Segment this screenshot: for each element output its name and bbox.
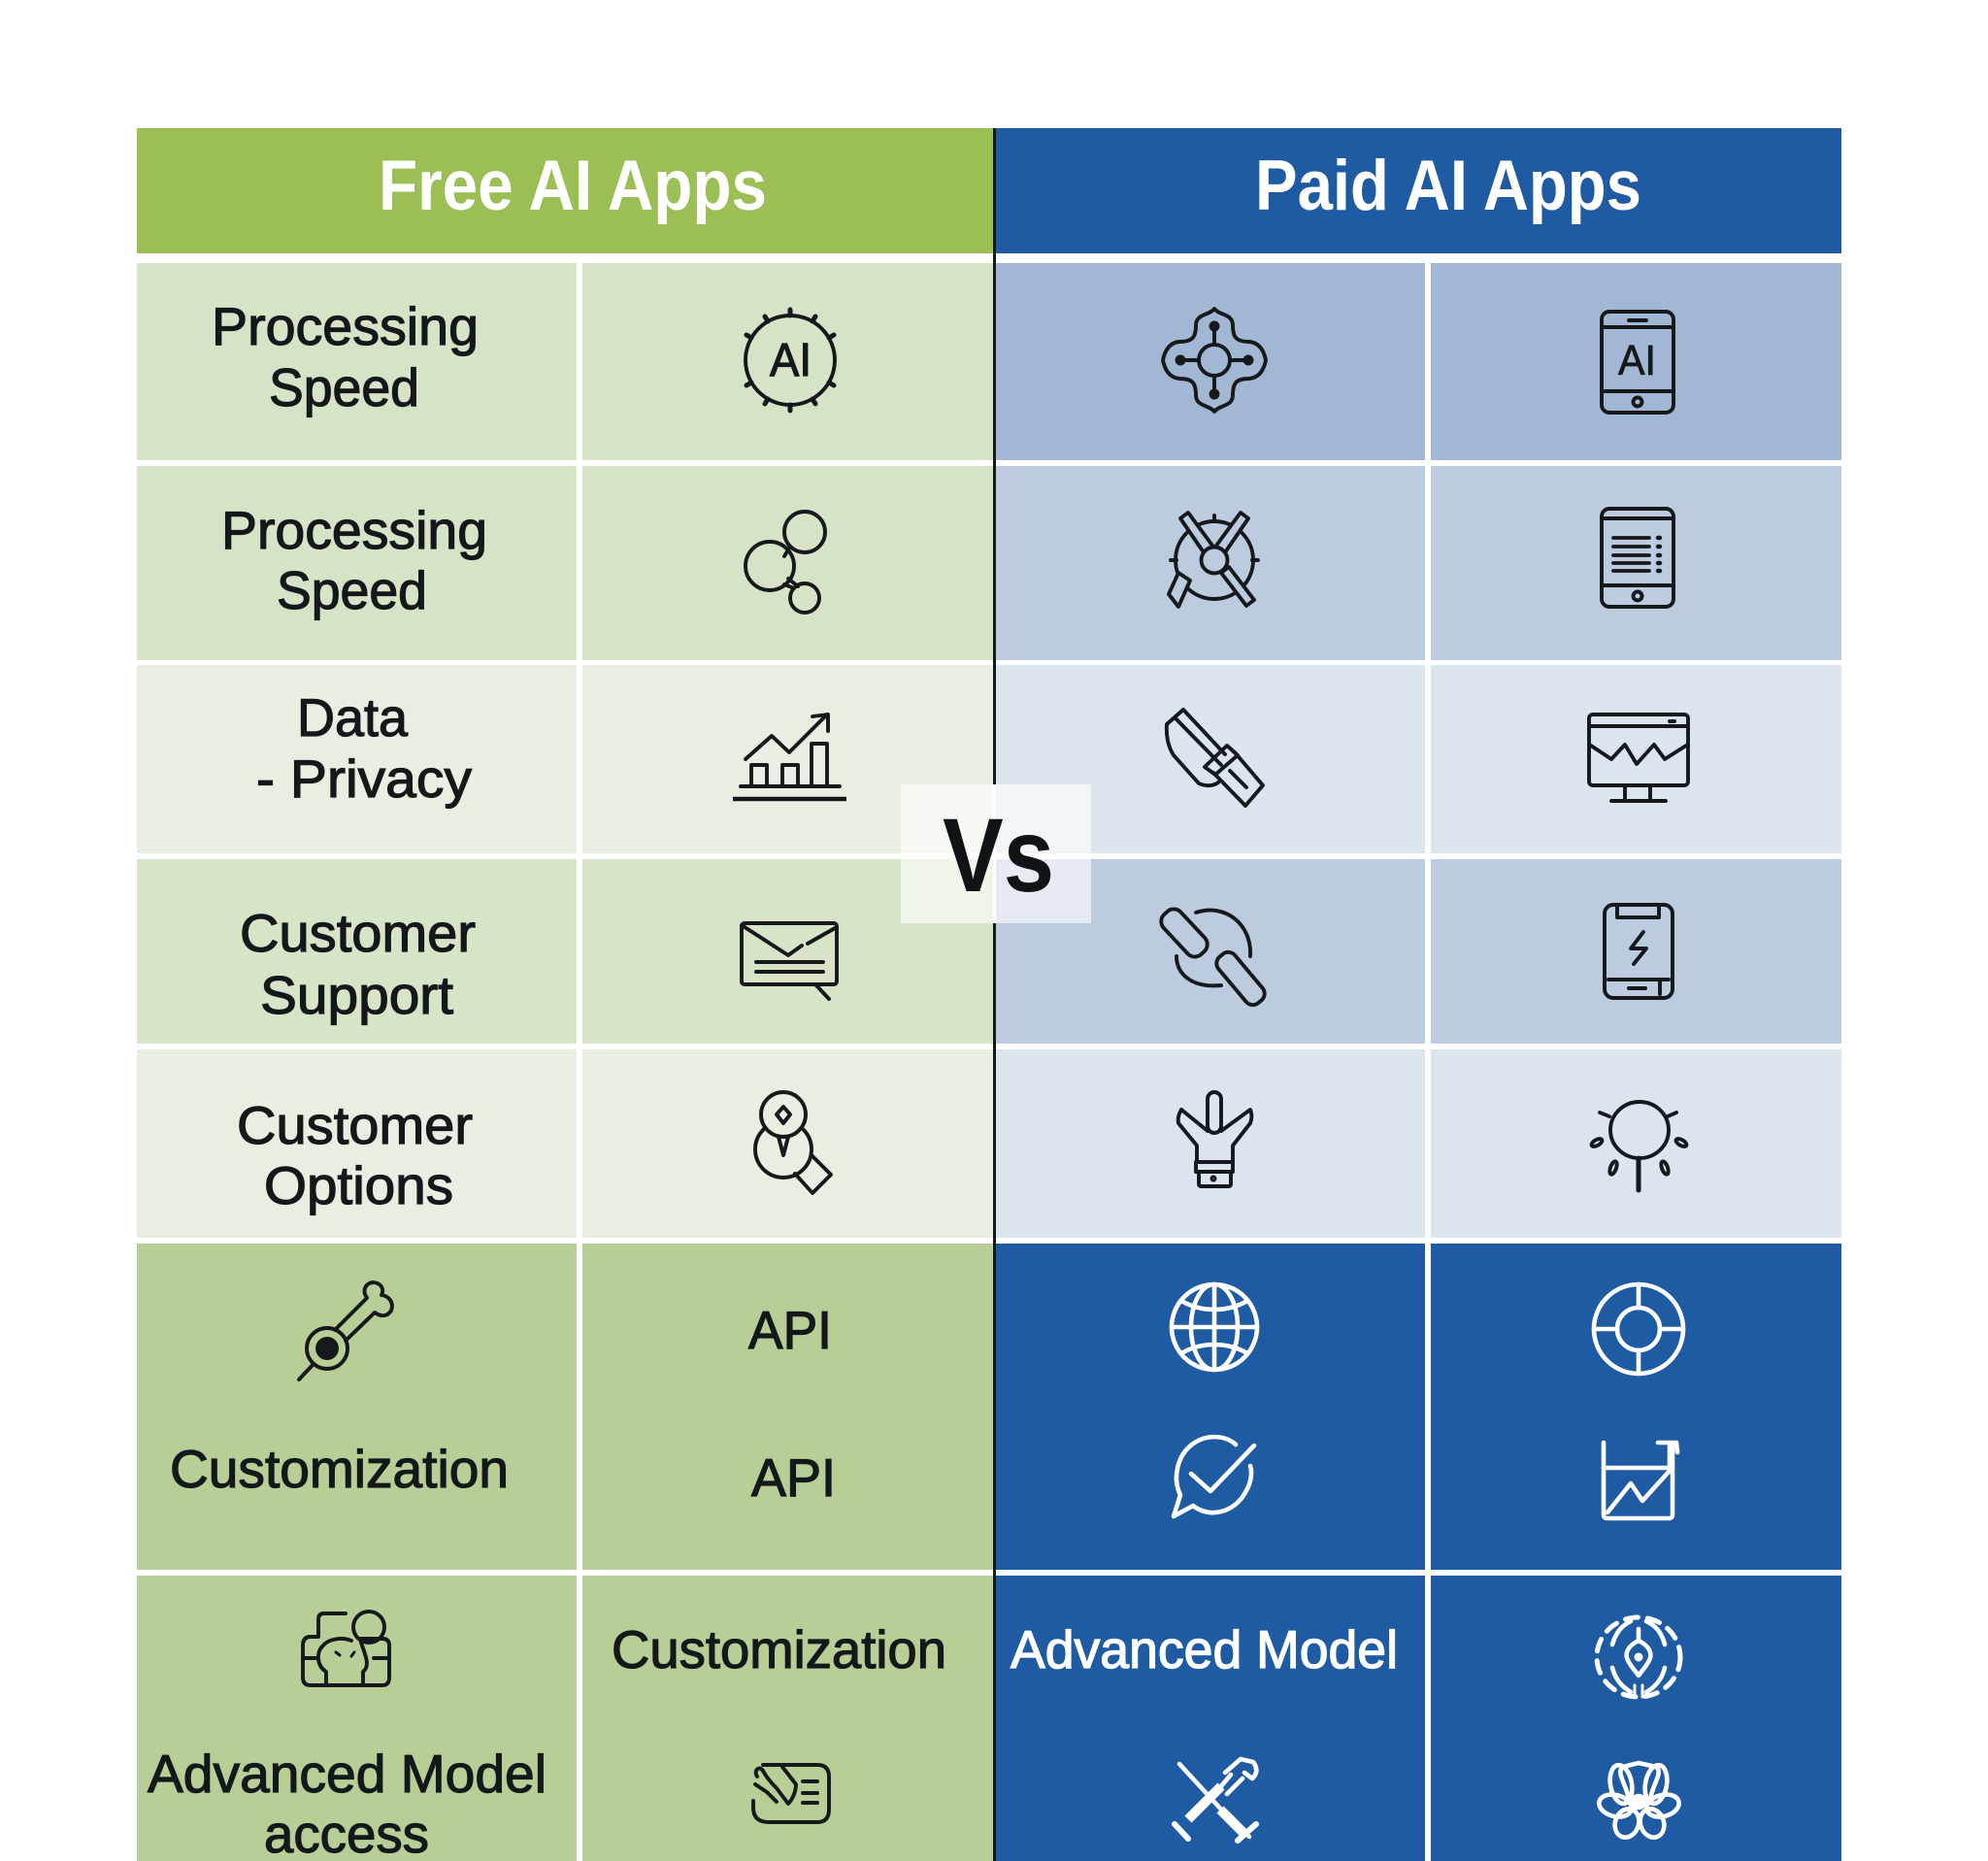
icon: location pin search	[755, 1092, 831, 1193]
icon: light bulb with rays	[1590, 1102, 1688, 1190]
label: Customization: Customization	[170, 1439, 509, 1499]
icon: chat check	[1174, 1437, 1254, 1516]
icon: knife	[1167, 710, 1263, 806]
center divider line upper	[993, 128, 996, 784]
label: API: API	[748, 1300, 832, 1360]
row 1: Processing Speed	[137, 263, 1841, 460]
header: Paid AI Apps	[996, 128, 1841, 253]
icon: AI chip circle	[746, 310, 835, 411]
header: Paid AI Apps: Paid AI Apps	[1255, 147, 1641, 225]
label: Customer: Customer	[237, 1095, 473, 1155]
row 3: Data Privacy	[137, 665, 1841, 853]
icon: document tablet	[1602, 509, 1673, 607]
row 4: Customer Support	[137, 859, 1841, 1044]
icon: dashed target eye	[1597, 1617, 1680, 1697]
icon: AI phone: AI	[1618, 337, 1656, 384]
label: Options: Options	[264, 1155, 453, 1215]
badge: Vs: Vs	[943, 796, 1054, 914]
icon: crossed tools	[1175, 1759, 1256, 1841]
icon: monitor with waveform	[1589, 714, 1688, 801]
icon: globe	[1172, 1284, 1257, 1370]
label: Customer: Customer	[240, 903, 476, 963]
badge: Vs	[901, 784, 1091, 923]
icon: document with signature	[753, 1765, 829, 1822]
icon: AI chip circle: AI	[770, 335, 812, 386]
row 6: Customization and API	[137, 1244, 1841, 1570]
icon: hand with fingers	[1178, 1092, 1252, 1186]
label: API second: API	[751, 1447, 836, 1508]
center divider line lower	[993, 923, 996, 1861]
icon: bone connector	[299, 1282, 392, 1379]
icon: broken link	[1157, 905, 1268, 1009]
row 7: Advanced Model access	[137, 1576, 1841, 1861]
label: Speed: Speed	[269, 357, 419, 417]
label: Processing Speed: Processing	[212, 296, 479, 356]
label: Support: Support	[260, 965, 453, 1025]
label: - Privacy: - Privacy	[256, 748, 473, 809]
icon: life ring	[1594, 1284, 1683, 1374]
icon: AI phone	[1602, 312, 1673, 413]
label: Processing: Processing	[221, 500, 487, 560]
icon: flower	[1597, 1763, 1681, 1841]
icon: envelope message	[742, 923, 837, 999]
label: Advanced Model white: Advanced Model	[1011, 1619, 1398, 1679]
row 2: Processing Speed	[137, 466, 1841, 660]
icon: connected circles	[746, 512, 825, 613]
label: Advanced Model: Advanced Model	[148, 1744, 547, 1804]
icon: crossed tools gear	[1169, 513, 1258, 607]
header: Free AI Apps: Free AI Apps	[379, 147, 767, 225]
label: Customization: Customization	[612, 1619, 946, 1679]
icon: camera with shape	[303, 1612, 389, 1685]
header: Free AI Apps	[137, 128, 993, 253]
label: Data: Data	[297, 687, 408, 748]
icon: growth chart	[733, 714, 846, 799]
icon: network cross	[1163, 309, 1266, 412]
icon: phone with lightning bolt	[1605, 905, 1673, 998]
icon: chart with arrow	[1604, 1443, 1677, 1518]
row 5: Customer Options	[137, 1049, 1841, 1238]
label: Speed: Speed	[277, 560, 427, 620]
